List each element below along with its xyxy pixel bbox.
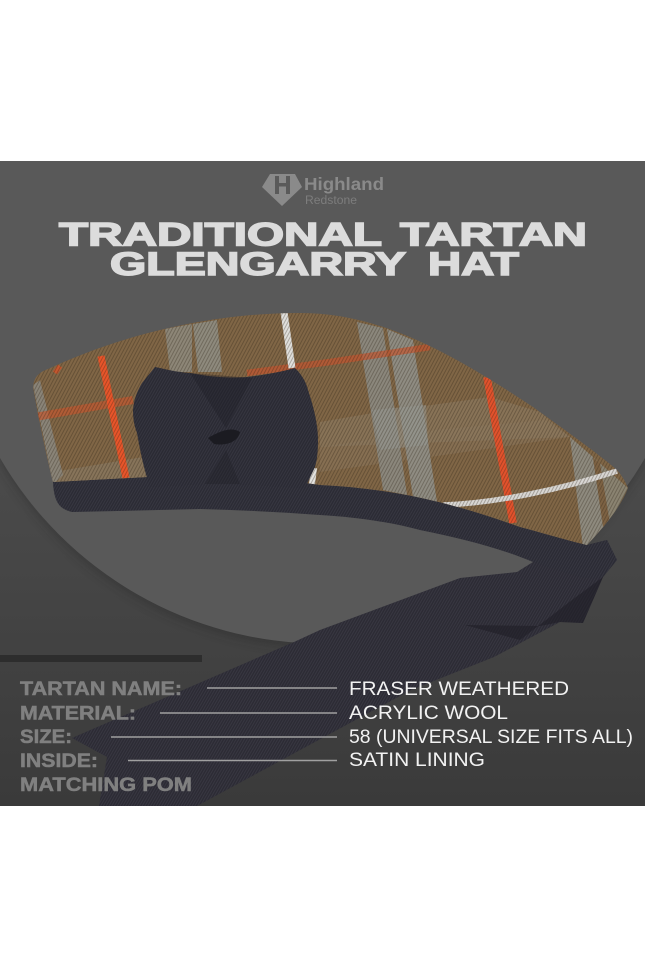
labels: INSIDE: bbox=[20, 751, 98, 772]
dark accent bar bbox=[0, 655, 202, 662]
panel: lighter circular backdrop bbox=[0, 310, 645, 644]
connector lines bbox=[111, 688, 337, 760]
orange lines bbox=[35, 400, 133, 417]
labels: MATCHING POM bbox=[20, 775, 192, 796]
ribbon tail bbox=[72, 562, 603, 806]
vertical grey bands bbox=[165, 324, 192, 372]
logo wordmark: Redstone bbox=[305, 195, 357, 207]
twill texture bbox=[33, 313, 628, 545]
hat bbox=[20, 300, 640, 806]
values: 58 (UNIVERSAL SIZE FITS ALL) bbox=[349, 727, 633, 748]
title: TRADITIONAL bbox=[59, 216, 382, 252]
tartan crown bbox=[33, 313, 628, 545]
values bbox=[349, 679, 633, 771]
values: FRASER WEATHERED bbox=[349, 679, 569, 700]
title: TARTAN bbox=[400, 216, 587, 252]
labels bbox=[20, 679, 192, 796]
title: GLENGARRY bbox=[110, 246, 406, 282]
labels: TARTAN NAME: bbox=[20, 679, 182, 700]
values: SATIN LINING bbox=[349, 750, 485, 771]
white lines bbox=[284, 312, 292, 368]
horizontal light bands bbox=[320, 397, 570, 447]
title bbox=[59, 216, 587, 282]
spec table bbox=[20, 679, 633, 796]
values: ACRYLIC WOOL bbox=[349, 703, 508, 724]
hat band bbox=[53, 477, 617, 578]
labels: MATERIAL: bbox=[20, 704, 136, 724]
labels: SIZE: bbox=[20, 727, 72, 748]
logo bbox=[262, 174, 384, 207]
title: HAT bbox=[428, 246, 519, 282]
infographic canvas bbox=[0, 161, 645, 806]
bow bbox=[133, 367, 318, 488]
icon: diamond logo mark bbox=[262, 174, 302, 206]
logo wordmark: Highland bbox=[304, 174, 384, 194]
panel: dark background bbox=[0, 161, 645, 806]
logo wordmark bbox=[304, 174, 384, 207]
